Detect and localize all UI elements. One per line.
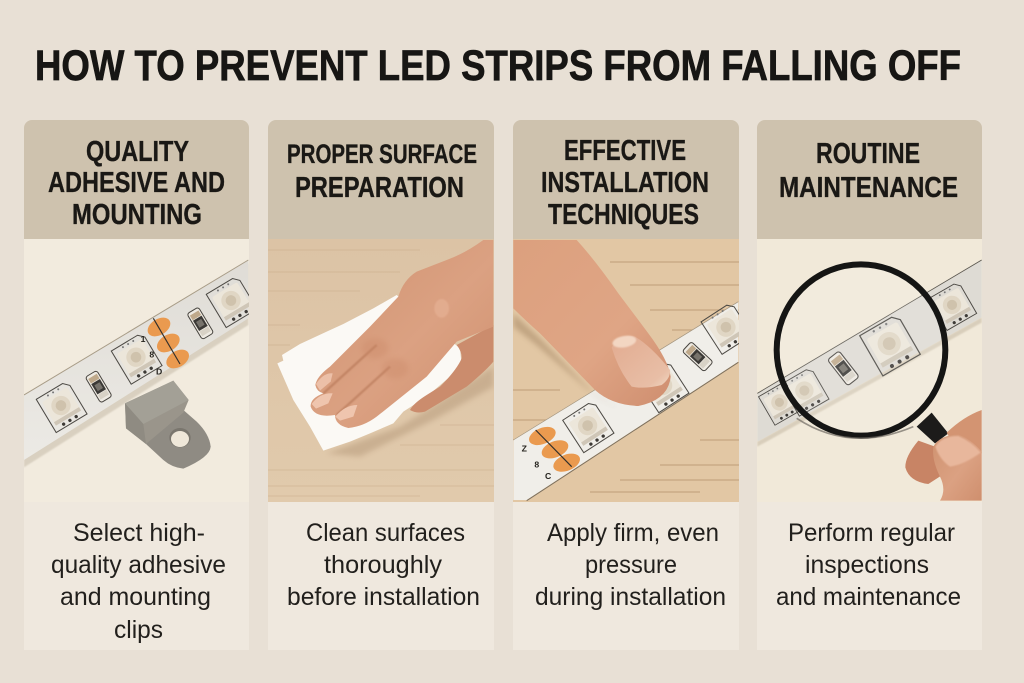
caption: clean surfaces <box>287 519 480 611</box>
heading: quality adhesive and mounting: ADHESIVE AND <box>48 167 225 199</box>
illustration: magnifying glass over strip <box>757 239 982 502</box>
LED strip: 1 <box>141 334 146 344</box>
panel header background <box>757 120 982 239</box>
LED strip <box>513 302 752 501</box>
caption: select high-quality: and mounting <box>60 583 211 611</box>
panel header background <box>513 120 739 239</box>
caption: clean surfaces: before installation <box>287 583 480 611</box>
LED strip <box>24 260 257 467</box>
heading: effective installation techniques: TECHNIQUES <box>548 199 699 231</box>
heading: routine maintenance: MAINTENANCE <box>779 172 958 204</box>
caption: perform inspections: and maintenance <box>776 583 961 611</box>
caption panel background <box>757 502 982 650</box>
LED strip: D <box>156 367 162 377</box>
caption: perform inspections: Perform regular <box>788 519 955 547</box>
caption: apply firm pressure: pressure <box>585 551 677 579</box>
caption: clean surfaces: thoroughly <box>324 551 443 579</box>
LED strip: Z <box>522 444 528 454</box>
caption panel background <box>513 502 739 650</box>
caption: select high-quality: clips <box>114 616 163 644</box>
mounting clip <box>125 381 211 469</box>
illustration: finger pressing strip on wood <box>513 239 752 502</box>
heading: effective installation techniques: EFFECTIVE <box>564 135 686 167</box>
panel: effective installation techniques <box>513 120 752 650</box>
illustration: LED strip with mounting clip <box>24 239 257 502</box>
cloth shadow <box>327 367 493 457</box>
caption: select high-quality <box>51 519 226 644</box>
cloth <box>277 295 461 451</box>
caption: apply firm pressure <box>535 519 726 611</box>
heading: routine maintenance <box>779 138 958 204</box>
panel: quality adhesive and mounting <box>24 120 257 650</box>
heading: proper surface preparation: PROPER SURFACE <box>287 139 477 169</box>
heading: quality adhesive and mounting <box>48 136 225 231</box>
illustration: hand wiping wood with cloth <box>268 239 494 502</box>
panel header background <box>24 120 249 239</box>
caption: select high-quality: quality adhesive <box>51 551 226 579</box>
heading: proper surface preparation <box>287 139 477 204</box>
panel header background <box>268 120 494 239</box>
LED strip: 8 <box>534 459 539 469</box>
LED strip: 8 <box>149 349 154 359</box>
caption: perform inspections <box>776 519 961 611</box>
heading: routine maintenance: ROUTINE <box>816 138 920 170</box>
hand holding magnifier <box>905 410 982 501</box>
magnifying glass <box>777 264 948 443</box>
caption: apply firm pressure: Apply firm, even <box>547 519 719 547</box>
caption: clean surfaces: Clean surfaces <box>306 519 465 547</box>
caption: apply firm pressure: during installation <box>535 583 726 611</box>
heading: proper surface preparation: PREPARATION <box>295 172 464 204</box>
panel: proper surface preparation <box>268 120 494 650</box>
heading: quality adhesive and mounting: QUALITY <box>86 136 189 168</box>
LED strip: C <box>545 471 552 481</box>
hand <box>311 240 493 428</box>
caption: perform inspections: inspections <box>805 551 929 579</box>
LED strip <box>757 260 982 447</box>
caption panel background <box>24 502 249 650</box>
finger <box>513 240 671 408</box>
caption: select high-quality: Select high- <box>73 519 205 547</box>
panel: routine maintenance <box>757 120 982 650</box>
caption panel background <box>268 502 494 650</box>
heading: effective installation techniques <box>541 135 709 231</box>
heading: effective installation techniques: INSTALLATION <box>541 167 709 199</box>
heading: quality adhesive and mounting: MOUNTING <box>72 199 202 231</box>
